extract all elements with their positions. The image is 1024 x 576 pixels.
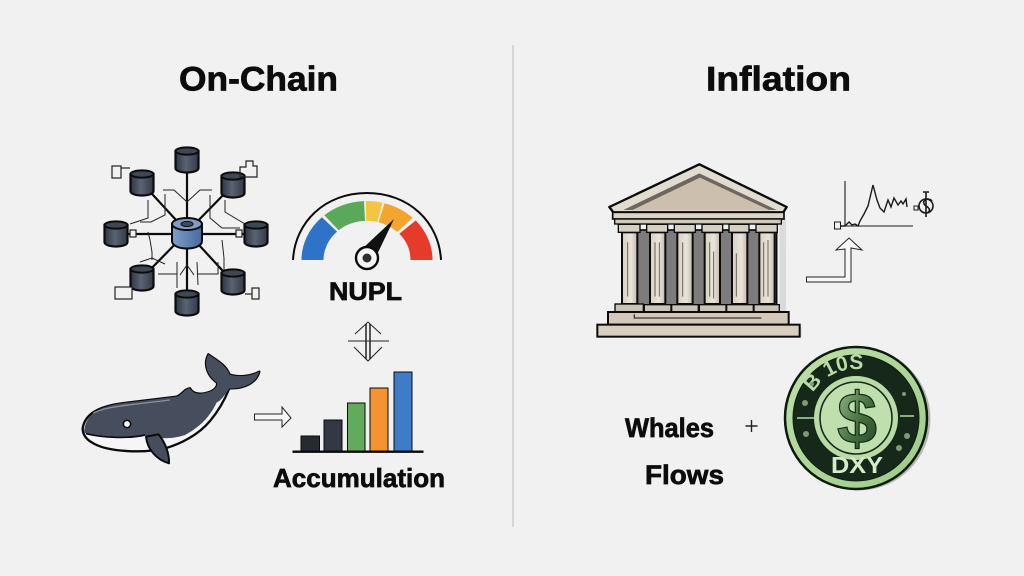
gauge outer arc bbox=[293, 193, 441, 260]
icon: blockchain network bbox=[104, 147, 268, 316]
bar chart: accumulation bbox=[293, 372, 423, 452]
icon: DXY dollar coin bbox=[784, 346, 930, 490]
dollar sign icon bbox=[914, 192, 933, 217]
arrow: up and down bbox=[348, 322, 389, 361]
icon: DXY dollar coin: DXY bbox=[831, 452, 883, 478]
line chart: inflation spike bbox=[834, 181, 933, 229]
icon: DXY dollar coin: $ bbox=[837, 379, 877, 459]
icon: central bank building bbox=[597, 164, 802, 338]
gauge needle bbox=[361, 219, 394, 263]
arrow: whale to bars bbox=[254, 407, 291, 427]
label: Whales: Whales bbox=[625, 413, 714, 443]
title: On-Chain: On-Chain bbox=[179, 60, 338, 98]
icon: DXY dollar coin: B 10S bbox=[803, 354, 862, 392]
title: Inflation: Inflation bbox=[706, 60, 851, 98]
gauge segments bbox=[312, 211, 422, 260]
label: Accumulation: Accumulation bbox=[273, 463, 445, 493]
chart: NUPL gauge bbox=[293, 193, 441, 269]
label: NUPL: NUPL bbox=[329, 278, 402, 306]
center divider bbox=[512, 45, 514, 527]
icon: whale bbox=[83, 354, 259, 463]
label: Flows: Flows bbox=[645, 460, 724, 490]
arrow: elbow up to chart bbox=[806, 238, 862, 282]
plus sign bbox=[746, 420, 758, 432]
